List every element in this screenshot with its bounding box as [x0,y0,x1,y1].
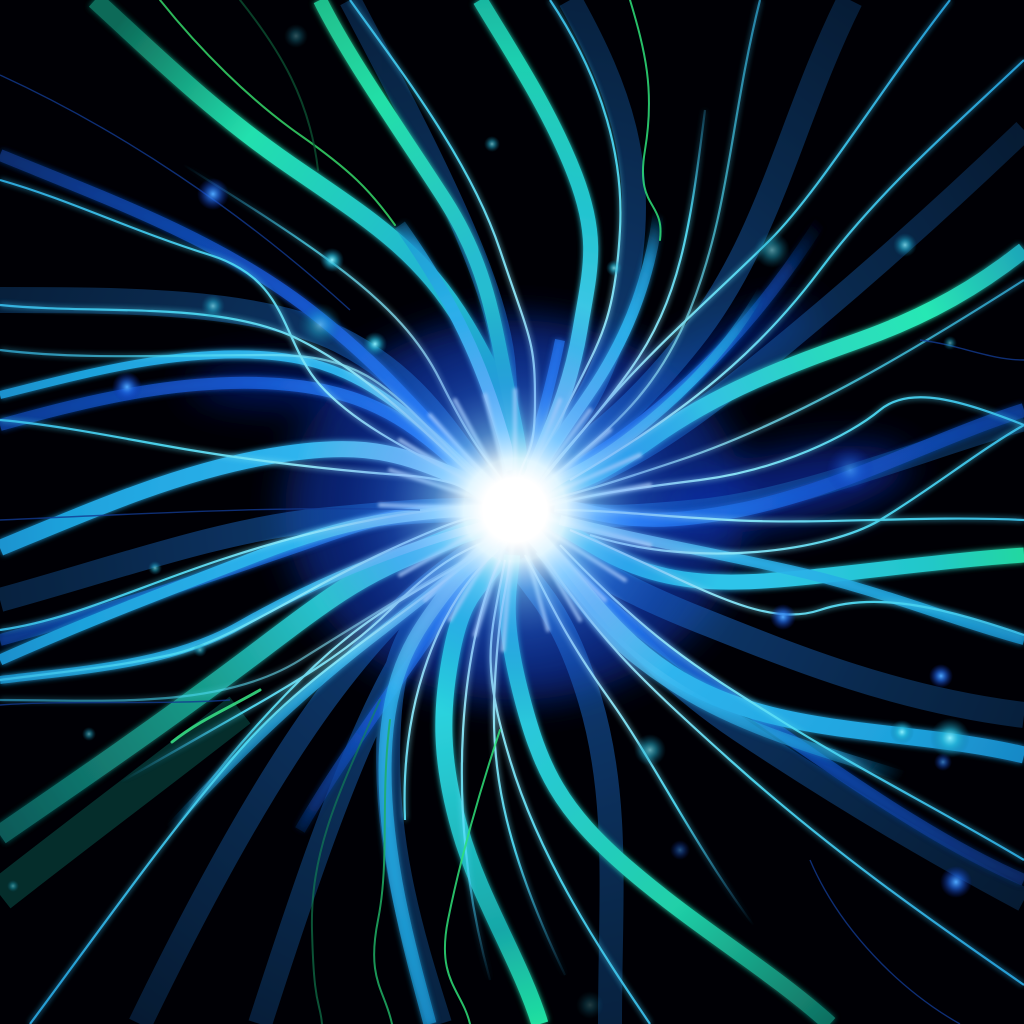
ribbon: lower left secondary [100,535,495,910]
ribbon: upper left inner [400,225,512,470]
ribbon: lower left [0,525,490,835]
ribbon: upper right [545,250,1024,495]
ribbon: left upper [0,449,495,548]
ribbon: right lower secondary [560,520,1024,640]
ribbon: bottom centre [444,560,540,1024]
ribbon: right side [535,515,1024,582]
ribbon: lower right tertiary [540,550,960,795]
central star rays [380,390,650,650]
ribbon: lower right [530,530,1024,755]
dark green band lower left [0,710,240,895]
saturated blue ribbons [0,120,1024,880]
ribbon: bottom right [508,555,830,1024]
ribbon: top centre [480,0,591,480]
background blue haze [190,290,915,700]
ribbon: left lower [0,510,480,660]
ribbon: lower centre left [385,545,495,1024]
ribbon: top right of centre [530,200,660,485]
ribbon: left mid [0,354,490,490]
ribbon: lower left outer [0,525,485,680]
ribbon: upper right secondary [545,220,790,490]
central glowing core [300,295,730,725]
ribbon: top [320,0,520,475]
ribbon: upper left [95,0,515,470]
green filaments [160,0,661,1024]
